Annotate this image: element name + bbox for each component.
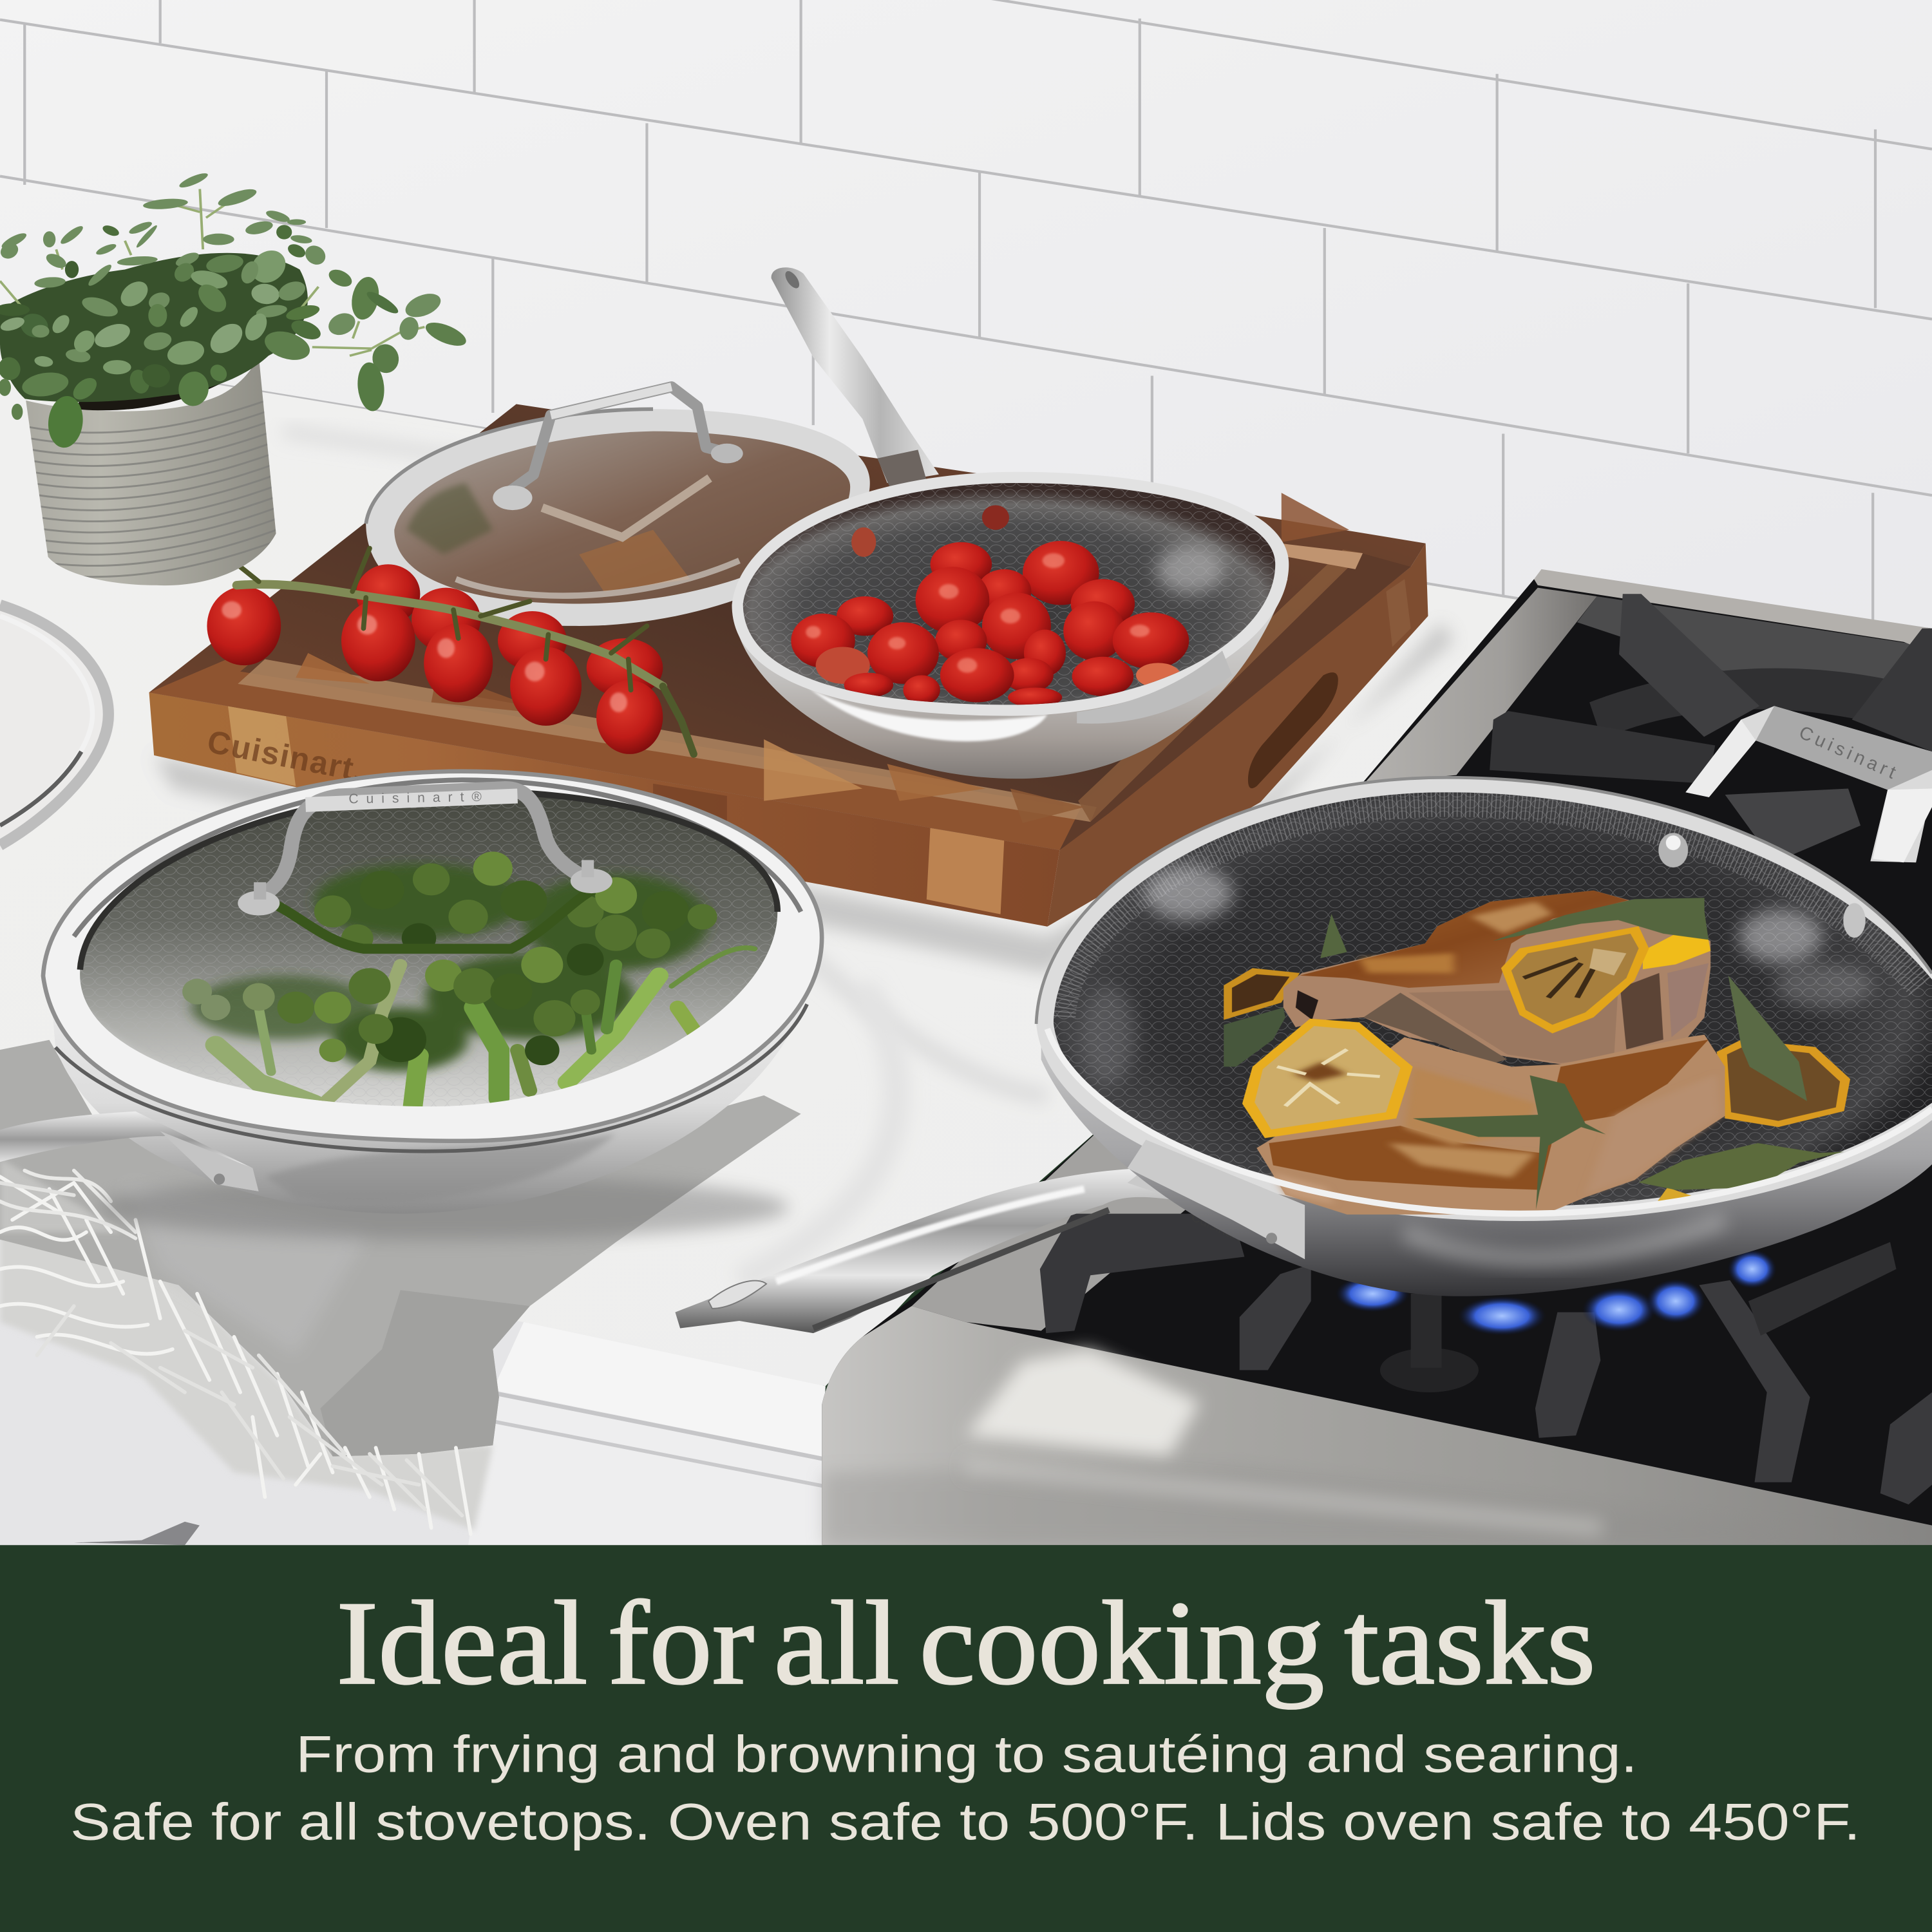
blue burner flames [1336,1249,1777,1336]
right loop handle [1685,706,1932,862]
handle bracket [1128,1140,1305,1259]
mist at glass bottom [113,1034,120,1040]
end grain patches [296,493,1349,823]
board logo: Cuisinart. [204,723,366,789]
middle lemon slice [1501,926,1649,1034]
soil [77,345,256,410]
board right face [1047,544,1428,927]
green caption band [0,1545,1932,1932]
food in the pan [1224,891,1850,1215]
lid glass [80,791,777,1106]
stainless front panel [822,1306,1932,1545]
right pan front rim [1047,1029,1932,1214]
towel body [0,1040,801,1456]
small pan handle [772,267,939,487]
counter front edge [493,1322,826,1456]
small pan interior [743,483,1275,705]
sage leaves [1224,898,1844,1209]
long pan handle [675,1168,1305,1333]
headline: Ideal for all cooking tasks [336,1578,1596,1710]
gray linen towel [0,1040,801,1534]
right pan interior [1035,776,1932,1220]
lid handle reflection [277,889,594,949]
small glass lid [366,387,870,626]
broccolini stems [216,948,755,1106]
board top surface [149,404,1426,850]
right lemon slice [1717,1039,1850,1127]
long pan handle: Cuisinart [1189,1209,1244,1245]
left pan body [50,936,813,1214]
towel fringe base [0,1232,493,1530]
rivets [1658,833,1866,938]
lid reflection [542,478,710,537]
cutting board [149,404,1454,973]
stainless back strip [1534,569,1932,653]
small pan side handle [1077,650,1232,724]
cabinet handle [74,1522,200,1545]
bright lemon back [1643,919,1710,969]
big lemon slice [1242,1019,1413,1138]
tomatoes on the vine [207,548,694,754]
rib bones [1363,993,1507,1064]
bottom pork chop [1256,1035,1725,1215]
broccolini [74,851,755,1125]
large right pan with pork chops [675,706,1932,1333]
broccolini florets [182,851,717,1065]
board left rim [149,647,1109,850]
lid handle [493,387,743,510]
stove body [822,579,1932,1545]
top pork chop [1283,891,1710,1064]
right handle logo: Cuisinart [1796,722,1899,783]
vine stem [236,548,694,754]
stainless left rail [1364,588,1597,784]
left pan handle [0,1112,259,1191]
small lemon slice left [1224,968,1300,1020]
herb plant [0,171,469,449]
marble countertop [0,348,1534,1386]
lid metal ring [43,772,822,1141]
lower cabinet [0,1232,823,1546]
right pan body [1041,986,1932,1296]
juice groove [238,659,1097,822]
small pan body [733,579,1287,779]
pan light reflections [1082,866,1873,1084]
small frying pan with tomatoes [732,267,1289,779]
pan shadow on towel [99,1175,788,1240]
subtitle line two: Safe for all stovetops. Oven safe to 500°F. Lids oven safe to 450°F. [70,1794,1861,1852]
bottom lemon [1655,1188,1696,1205]
tomatoes in pan [791,541,1189,707]
lid logo: Cuisinart® [348,790,482,806]
plant pot [26,363,276,586]
small pan rim [732,472,1289,716]
front burner grate [1040,1214,1932,1504]
large left pan with glass lid [0,772,822,1240]
lid handle [238,788,612,916]
towel fringe threads [0,1171,471,1534]
subtitle line one: From frying and browning to sautéing and searing. [296,1725,1638,1783]
lower stainless rail [912,1115,1232,1331]
stove [822,569,1932,1545]
board left face [149,692,1059,927]
board handle slot [1248,672,1338,788]
rear burner grate [1490,594,1932,862]
left edge lid [0,600,115,850]
board shadow [154,622,1454,973]
tiled back wall [0,0,1932,690]
rear wall of cooktop [1577,596,1932,703]
right pan rim [1036,777,1932,1221]
